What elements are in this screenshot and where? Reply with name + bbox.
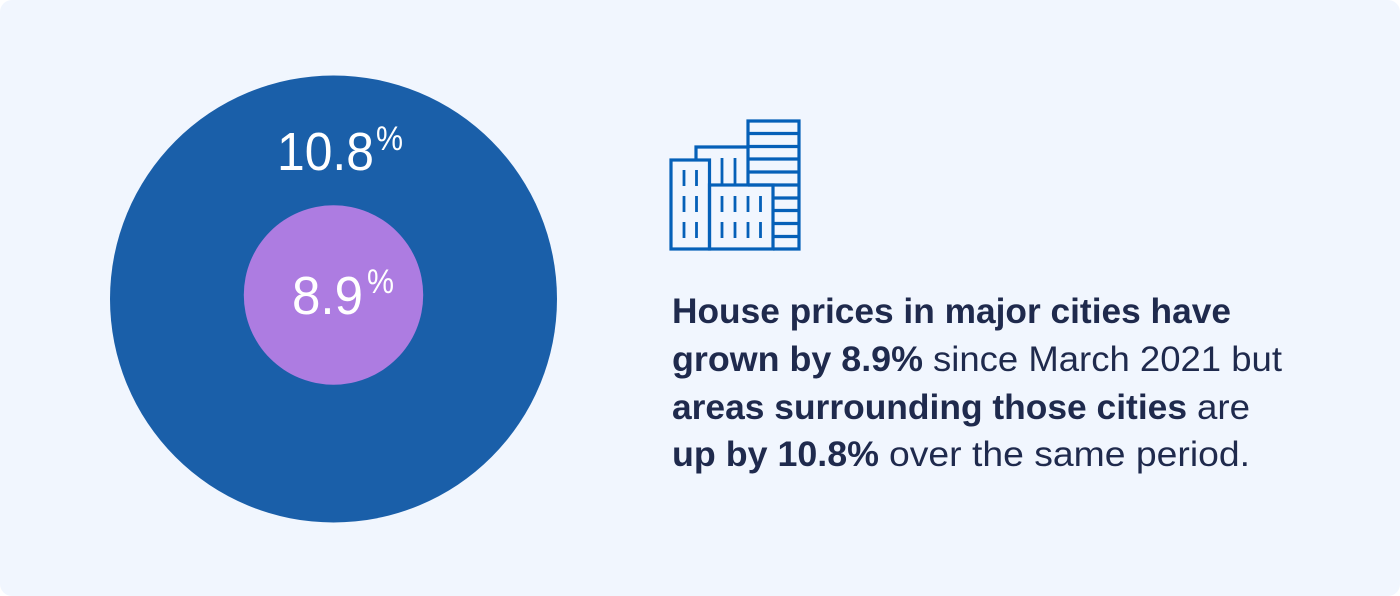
text block: description: grown by 8.9% (672, 340, 923, 379)
text block: description: House prices in major cities have (672, 292, 1231, 331)
value: 10.8%: % (376, 120, 403, 158)
text block: description (672, 292, 1282, 474)
text block: description: up by 10.8% (672, 435, 879, 474)
inner circle: major cities (244, 205, 423, 385)
text block: description: are (1197, 388, 1250, 427)
outer circle: surrounding areas (110, 76, 557, 522)
value: 10.8%: 10.8 (277, 122, 374, 182)
icon: city buildings (671, 121, 799, 249)
text block: description: since March 2021 but (933, 340, 1282, 379)
text block: description: areas surrounding those cities (672, 388, 1187, 427)
value: 8.9%: 8.9 (292, 266, 363, 326)
text block: description: over the same period. (889, 435, 1250, 474)
chart: nested circles (110, 76, 557, 522)
value: 8.9%: % (367, 263, 394, 301)
